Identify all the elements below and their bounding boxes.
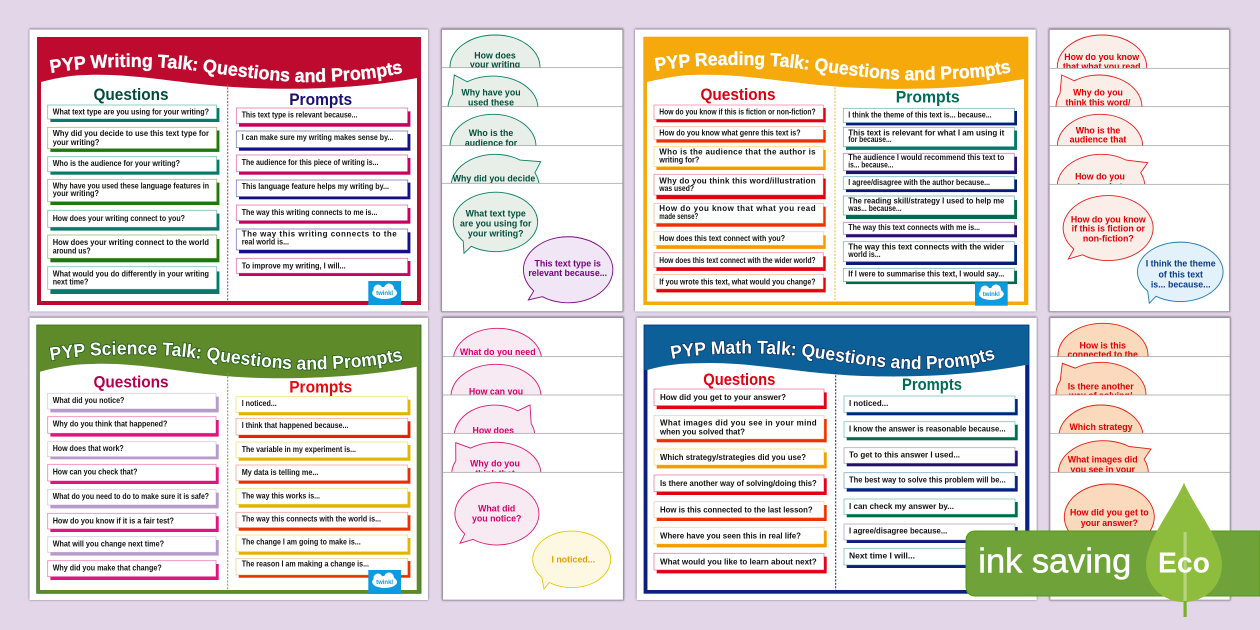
bubble: how do you know if this is fiction xyxy=(1063,196,1153,261)
heading: science prompts: Prompts xyxy=(289,379,352,397)
prompt card: To improve my writing, I will... xyxy=(242,261,346,270)
prompt card xyxy=(236,205,410,224)
question card: Why do you think this word/illustration xyxy=(659,176,816,185)
prompt card xyxy=(843,242,1017,265)
bubble: who is the audience that: audience that xyxy=(1070,135,1126,145)
question card xyxy=(48,393,219,412)
prompt card: I can check my answer by... xyxy=(849,502,954,511)
title: writing: PYP Writing Talk: Questions and Prompts xyxy=(50,53,402,82)
prompt card xyxy=(844,524,1018,543)
question card: Why did you decide to use this text type for xyxy=(53,129,209,138)
bubble: why do you think: think that xyxy=(475,469,515,479)
prompt card xyxy=(843,127,1017,150)
prompt card xyxy=(843,268,1017,284)
bubble: how do you know if this is fiction: How do you know xyxy=(1071,215,1146,225)
question card: writing for? xyxy=(658,156,699,165)
bubble: how is this connected xyxy=(1058,323,1148,387)
prompt card: The audience I would recommend this text to xyxy=(848,153,1004,162)
question card: What text type are you using for your writing? xyxy=(53,107,209,116)
prompt card xyxy=(236,108,410,127)
panel: writing speech bubble sheets xyxy=(442,30,623,312)
question cards: science xyxy=(48,393,219,580)
prompt card xyxy=(236,418,410,438)
logo: twinkl xyxy=(368,281,401,305)
question card xyxy=(48,127,219,152)
heading: writing prompts: Prompts xyxy=(289,91,352,109)
prompt card xyxy=(236,488,410,508)
question card xyxy=(654,105,826,122)
question card: How do you know that what you read xyxy=(659,204,816,213)
bubble: how can you: How can you xyxy=(469,386,523,396)
question card xyxy=(48,235,219,262)
logo: twinkl: twinkl xyxy=(376,580,393,586)
question card: Who is the audience that the author is xyxy=(659,147,816,156)
bubble: why have you: Why have you xyxy=(461,88,521,98)
bubble: how do you xyxy=(1057,154,1148,218)
prompt card: The way this writing connects to me is... xyxy=(242,208,377,217)
question card: next time? xyxy=(53,277,88,286)
prompt cards: writing xyxy=(236,108,410,276)
prompt card: The way this text connects with the wider xyxy=(848,242,1004,251)
question card: around us? xyxy=(53,246,91,255)
prompt card: The reason I am making a change is... xyxy=(242,559,369,568)
bubble: how does xyxy=(454,405,535,469)
bubble: i think the theme: I think the theme xyxy=(1146,259,1216,269)
prompt card: The way this connects with the world is... xyxy=(242,514,381,523)
prompt card: The reading skill/strategy I used to help me xyxy=(848,196,1005,205)
icon: leaf xyxy=(1146,483,1222,617)
question card xyxy=(654,449,827,468)
bubble: why did you decide: Why did you decide xyxy=(453,174,535,184)
prompt card xyxy=(236,512,410,531)
question card: How does this text connect with the wider world? xyxy=(659,256,816,265)
bubble: what text type: What text type xyxy=(466,209,526,219)
question cards: writing xyxy=(48,105,219,294)
prompt card xyxy=(843,222,1017,237)
panel: math speech bubble sheets xyxy=(1050,318,1230,600)
prompt card: This text is relevant for what I am using it xyxy=(848,128,1005,137)
bubble: what text type: your writing? xyxy=(468,229,524,239)
prompt card: I agree/disagree with the author because... xyxy=(848,178,990,187)
question card: Is there another way of solving/doing this? xyxy=(660,479,817,488)
prompt card: The variable in my experiment is... xyxy=(242,445,356,454)
question card xyxy=(48,442,219,459)
panel: writing poster xyxy=(28,28,430,313)
question card xyxy=(654,274,826,292)
question card xyxy=(48,267,219,294)
question card: How do you know if it is a fair test? xyxy=(53,516,174,525)
bubble: why have you xyxy=(448,75,538,140)
heading: math prompts: Prompts xyxy=(902,376,962,394)
question card: How did you get to your answer? xyxy=(660,393,786,402)
bubble: is there another: Is there another xyxy=(1068,381,1134,391)
label: eco: Eco xyxy=(1158,547,1210,579)
bubble: how does your writing xyxy=(450,35,540,99)
bubble: how did you get: How did you get to xyxy=(1070,508,1149,518)
question card: How does your writing connect to the world xyxy=(53,238,209,247)
prompt card: I think that happened because... xyxy=(242,421,348,430)
prompt card: The way this works is... xyxy=(242,491,320,500)
bubble: who is the audience xyxy=(450,114,536,178)
heading: math questions: Questions xyxy=(703,371,775,389)
question card: What images did you see in your mind xyxy=(660,419,817,428)
prompt card: My data is telling me... xyxy=(242,468,318,477)
question card: What would you do differently in your writing xyxy=(53,270,209,279)
question card xyxy=(48,561,219,580)
bubble: what do you need: What do you need xyxy=(460,347,536,357)
bubble: how do you know if this is fiction: non-fiction? xyxy=(1083,234,1134,244)
question card: Why have you used these language features in xyxy=(53,181,209,190)
heading: reading prompts: Prompts xyxy=(896,89,960,107)
bubble: how do you know if this is fiction: if this is fiction or xyxy=(1072,224,1146,234)
bubble: why do you think xyxy=(452,442,541,506)
prompt card xyxy=(236,535,410,555)
prompt cards: math xyxy=(844,396,1018,568)
question cards: math xyxy=(654,389,827,573)
bubble: how do you: know what xyxy=(1078,181,1123,191)
question card: What will you change next time? xyxy=(53,539,164,548)
bubble: what did you notice xyxy=(455,483,539,545)
question card: If you wrote this text, what would you change? xyxy=(659,277,816,286)
label: ink saving: ink saving xyxy=(978,542,1131,580)
question card: How is this connected to the last lesson? xyxy=(660,506,813,515)
bubble: how do you know that: that what you read xyxy=(1063,61,1141,71)
prompt card: I noticed... xyxy=(242,399,277,408)
prompt card xyxy=(844,499,1018,517)
question card: when you solved that? xyxy=(659,427,745,436)
bubble: this text type is relevant: This text type is xyxy=(534,259,601,269)
prompt card xyxy=(236,155,410,175)
question card xyxy=(48,489,219,508)
logo: twinkl: twinkl xyxy=(376,291,393,297)
question card xyxy=(48,179,219,205)
question card xyxy=(48,157,219,175)
question card xyxy=(654,232,826,249)
prompt card: Next time I will... xyxy=(849,551,915,560)
prompt card: world is... xyxy=(847,250,881,259)
prompt card xyxy=(236,442,410,461)
question card: How do you know if this is fiction or non-fiction? xyxy=(659,107,816,116)
title: math: PYP Math Talk: Questions and Prompts xyxy=(670,339,995,370)
question card: How does this text connect with you? xyxy=(659,234,785,243)
question card: How does your writing connect to you? xyxy=(53,214,185,223)
bubble: what images did: What images did xyxy=(1068,455,1138,465)
prompt card: The way this text connects with me is... xyxy=(848,223,980,232)
bubble: what text type xyxy=(453,192,538,253)
bubble: how can you xyxy=(451,364,541,428)
bubble: why do you think: Why do you xyxy=(470,459,520,469)
bubble: is there another xyxy=(1056,362,1146,426)
bubble: which strategy xyxy=(1059,405,1143,469)
bubble: why do you think: think this word/ xyxy=(1066,98,1131,108)
prompt card xyxy=(844,473,1018,492)
logo: twinkl: twinkl xyxy=(983,292,1000,298)
prompt cards: science xyxy=(236,397,410,578)
logo: twinkl xyxy=(368,570,401,594)
prompt card: I know the answer is reasonable because... xyxy=(849,425,1006,434)
question card: your writing? xyxy=(53,138,99,147)
bubble: how does your writing: How does xyxy=(474,50,516,60)
question card: Why do you think that happened? xyxy=(53,419,168,428)
question cards: reading xyxy=(654,105,826,292)
heading: reading questions: Questions xyxy=(700,86,776,104)
question card xyxy=(654,203,826,227)
question card xyxy=(48,537,219,556)
bubble: what text type: are you using for xyxy=(460,219,532,229)
bubble: what did you notice: you notice? xyxy=(472,514,521,524)
prompt card xyxy=(236,180,410,199)
prompt card: This language feature helps my writing by... xyxy=(242,182,389,191)
prompt card: The change I am going to make is... xyxy=(242,537,361,546)
prompt card: I can make sure my writing makes sense by... xyxy=(242,133,393,142)
question card xyxy=(654,475,827,495)
question card: How does that work? xyxy=(53,444,124,453)
bubble: i noticed: I noticed... xyxy=(552,554,595,564)
question card xyxy=(48,210,219,231)
prompt card: If I were to summarise this text, I would say... xyxy=(848,270,1004,279)
prompt card xyxy=(843,196,1017,219)
question card xyxy=(654,174,826,199)
question card: Why did you make that change? xyxy=(53,563,162,572)
prompt card: This text type is relevant because... xyxy=(242,111,357,120)
question card xyxy=(654,253,826,271)
prompt card xyxy=(843,108,1017,125)
title: reading: PYP Reading Talk: Questions and Prompts xyxy=(654,51,1010,80)
bubble: how does: How does xyxy=(473,425,514,435)
bubble: why do you think: Why do you xyxy=(1073,88,1123,98)
bubble: what images did: you see in your xyxy=(1070,464,1136,474)
prompt card: I agree/disagree because... xyxy=(849,526,947,535)
bubble: how do you know that: How do you know xyxy=(1064,52,1139,62)
bubble: i noticed xyxy=(533,531,611,589)
prompt card: for because... xyxy=(848,135,892,144)
bubble: i think the theme xyxy=(1137,242,1223,303)
panel: reading poster xyxy=(634,28,1038,313)
question card: Who is the audience for your writing? xyxy=(53,159,180,168)
prompt card xyxy=(236,131,410,151)
question card: was used? xyxy=(658,184,694,193)
prompt card xyxy=(843,153,1017,174)
bubble: why have you: used these xyxy=(468,98,514,108)
prompt card xyxy=(844,422,1018,440)
prompt cards: reading xyxy=(843,108,1017,284)
prompt card xyxy=(236,558,410,578)
prompt card: To get to this answer I used... xyxy=(849,451,960,460)
bubble: how does your writing: your writing xyxy=(470,60,520,70)
question card xyxy=(654,527,827,547)
bubble: what did you notice: What did xyxy=(478,504,515,514)
heading: writing questions: Questions xyxy=(94,86,168,104)
prompt card: The way this writing connects to the xyxy=(242,230,397,239)
bubble: i think the theme: is... because... xyxy=(1151,279,1211,289)
question card xyxy=(654,502,827,521)
question card: your writing? xyxy=(53,189,99,198)
question card xyxy=(654,553,827,573)
prompt card: is... because... xyxy=(848,161,893,170)
prompt card: was... because... xyxy=(847,204,902,213)
prompt card: real world is... xyxy=(242,237,289,246)
bubble: why did you decide xyxy=(451,154,541,218)
bubble: how did you get xyxy=(1064,484,1154,550)
bubble: this text type is relevant xyxy=(523,237,613,303)
question card: Where have you seen this in real life? xyxy=(660,531,801,540)
badge: ink saving eco xyxy=(966,483,1260,617)
bubble: what images did xyxy=(1058,441,1151,505)
prompt card xyxy=(844,396,1018,415)
question card xyxy=(48,513,219,532)
bubble: how did you get: your answer? xyxy=(1081,518,1138,528)
bubble: i think the theme: of this text xyxy=(1158,269,1203,279)
question card: What do you need to do to make sure it is safe? xyxy=(53,492,209,501)
panel: science poster xyxy=(28,316,430,602)
prompt card: I noticed... xyxy=(849,399,888,408)
bubble: is there another: way of solving/ xyxy=(1068,390,1133,400)
bubble: how is this connected: How is this xyxy=(1079,340,1126,350)
bubble: this text type is relevant: relevant because... xyxy=(528,268,607,278)
bubble: how do you know that xyxy=(1057,35,1147,99)
bubble: who is the audience: audience for xyxy=(465,138,518,148)
bubble: how is this connected: connected to the xyxy=(1068,350,1138,360)
question card xyxy=(654,127,826,143)
prompt card: The audience for this piece of writing is... xyxy=(242,158,378,167)
panel: math poster xyxy=(635,316,1038,602)
prompt card xyxy=(236,229,410,253)
bubble: who is the audience that: Who is the xyxy=(1076,125,1120,135)
bubble: who is the audience: Who is the xyxy=(469,128,513,138)
prompt card xyxy=(843,177,1017,192)
panel: reading speech bubble sheets xyxy=(1049,30,1229,312)
question card xyxy=(48,417,219,437)
prompt card xyxy=(236,465,410,484)
question card xyxy=(654,416,827,442)
question card: Which strategy/strategies did you use? xyxy=(660,453,806,462)
bubble: who is the audience that xyxy=(1057,114,1143,178)
prompt card: The best way to solve this problem will be... xyxy=(849,476,1006,485)
question card: What would you like to learn about next? xyxy=(660,557,817,566)
prompt card xyxy=(844,548,1018,568)
question card xyxy=(654,147,826,170)
logo: twinkl xyxy=(975,282,1008,306)
prompt card xyxy=(844,448,1018,466)
bubble: how do you: How do you xyxy=(1075,171,1125,181)
panel: science speech bubble sheets xyxy=(443,318,623,600)
prompt card: I think the theme of this text is... because... xyxy=(848,111,992,120)
bubble: which strategy: Which strategy xyxy=(1069,422,1133,432)
prompt card xyxy=(236,258,410,276)
question card: What did you notice? xyxy=(53,396,124,405)
question card: made sense? xyxy=(659,212,698,221)
question card: How do you know what genre this text is? xyxy=(659,128,801,137)
bubble: what do you need xyxy=(453,328,542,392)
title: science: PYP Science Talk: Questions and Prompts xyxy=(49,340,403,370)
question card xyxy=(48,464,219,484)
heading: science questions: Questions xyxy=(94,374,168,392)
question card xyxy=(654,389,827,409)
bubble: why do you think xyxy=(1056,75,1142,139)
prompt card xyxy=(236,397,410,415)
question card: How can you check that? xyxy=(53,467,137,476)
question card xyxy=(48,105,219,122)
